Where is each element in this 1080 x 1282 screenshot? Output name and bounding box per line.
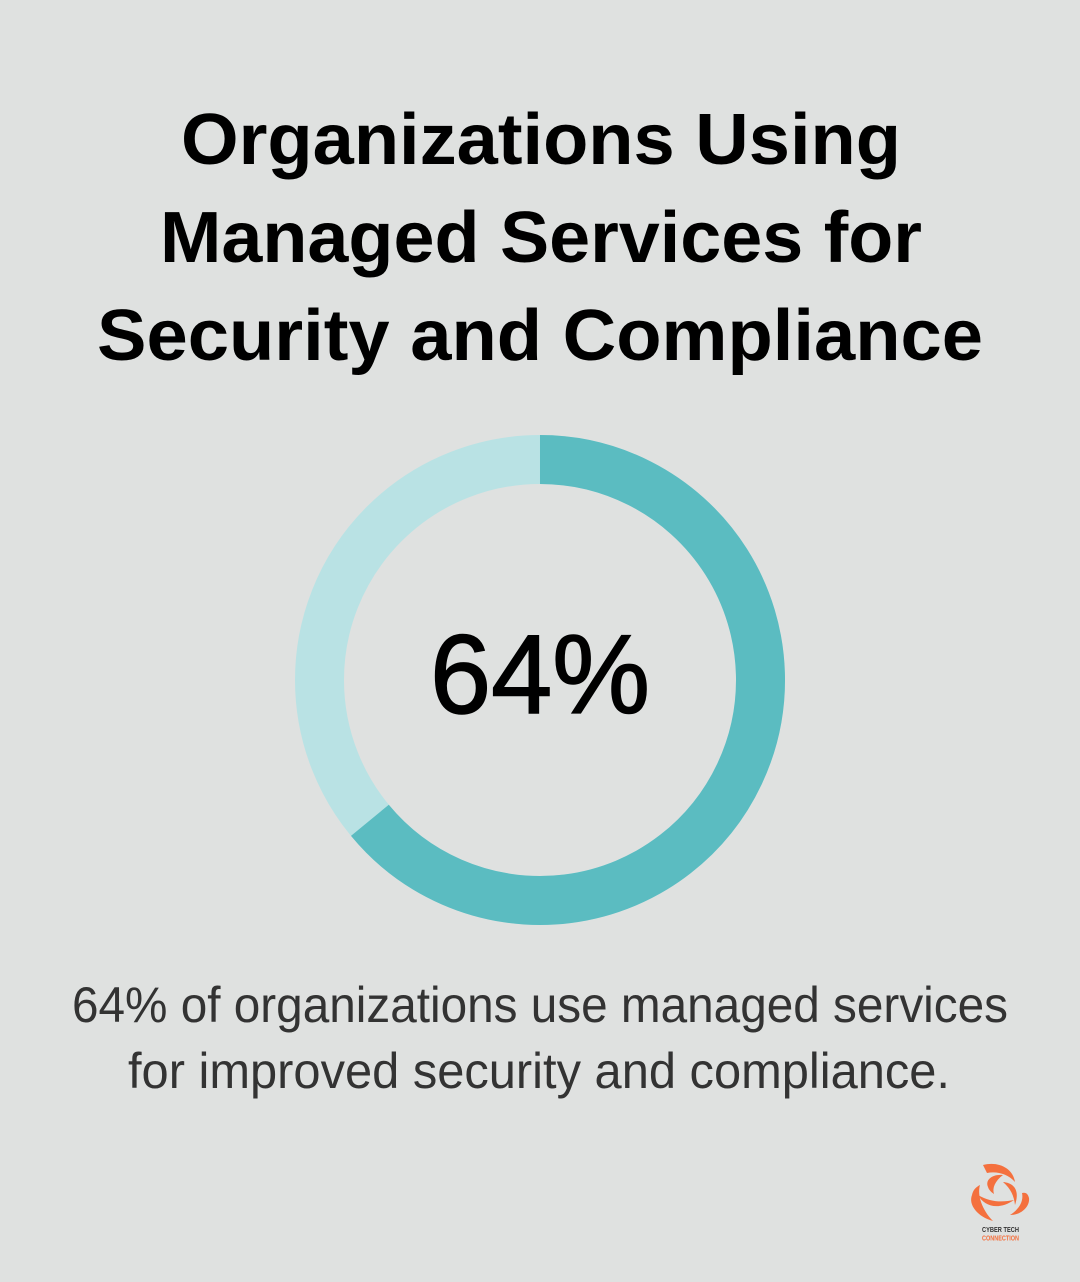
- logo: Cyber Tech Connection: [971, 1164, 1029, 1242]
- title: Organizations Using: [181, 100, 901, 180]
- description text: [72, 977, 1008, 1099]
- title: Managed Services for: [160, 198, 922, 278]
- logo icon: [971, 1164, 1029, 1221]
- description text: for improved security and compliance.: [128, 1043, 950, 1099]
- description text: 64% of organizations use managed services: [72, 977, 1008, 1033]
- donut chart: 64%: [320, 460, 761, 901]
- logo: Cyber Tech Connection: CONNECTION: [982, 1234, 1019, 1242]
- title: [97, 100, 983, 376]
- title: Security and Compliance: [97, 296, 983, 376]
- logo wordmark: CYBER TECH: [982, 1225, 1019, 1234]
- donut value: 64%: [430, 612, 650, 737]
